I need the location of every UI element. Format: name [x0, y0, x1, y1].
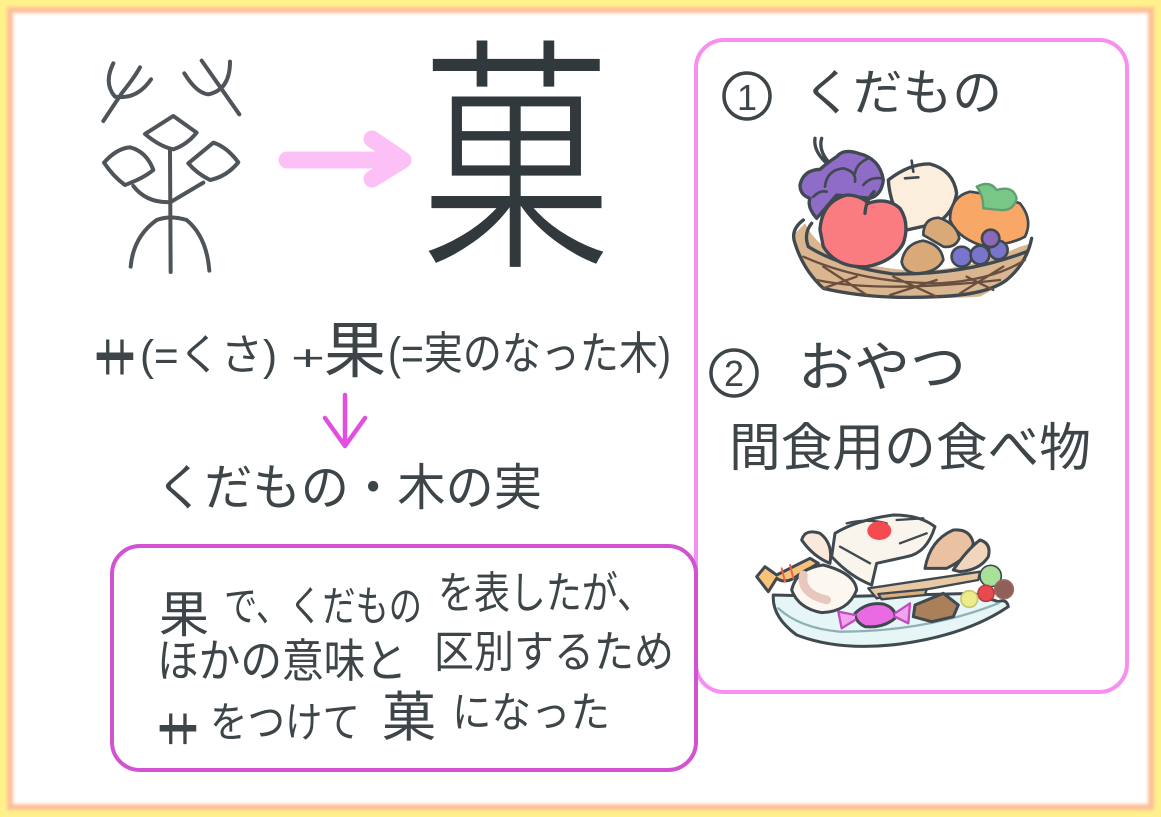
panel: explanation callout: [112, 546, 696, 770]
illustration: plate of sweets: [757, 515, 1013, 646]
chocolate block: [913, 593, 958, 622]
large character: 菓: [419, 23, 613, 303]
callout line 3 left: をつけて: [210, 699, 360, 746]
radical reading: (=くさ): [140, 332, 277, 380]
result text: くだもの・木の実: [156, 460, 542, 516]
icon: ancient pictograph of the character: [103, 61, 239, 272]
callout line 2 right: 区別するため: [434, 628, 674, 677]
grass radical: 艹: [157, 705, 199, 799]
small grapes: [952, 230, 1008, 267]
persimmon: [950, 184, 1028, 245]
panel: meanings: [696, 40, 1127, 692]
fruit character: 果: [159, 587, 209, 643]
heading: meaning 1: [724, 65, 1002, 121]
basket: [794, 220, 1032, 299]
callout line 3 right: になった: [452, 689, 610, 736]
label: snack: おやつ: [798, 338, 966, 398]
cake: [832, 515, 935, 585]
plate: [773, 593, 1008, 646]
grapes: [800, 138, 883, 218]
number 1: [724, 73, 770, 119]
number 2: 2: [724, 353, 744, 394]
arrow: down: [325, 395, 365, 446]
grass radical: 艹: [94, 329, 136, 437]
embedded large character: 菓: [382, 688, 436, 748]
fruit character: 果: [324, 317, 386, 386]
text: snack definition: 間食用の食べ物: [729, 420, 1091, 478]
chestnuts: [902, 218, 959, 273]
number 2: [711, 350, 757, 396]
heading: meaning 2: [711, 338, 966, 398]
apple: [820, 192, 906, 267]
wafer sticks: [868, 572, 980, 599]
callout line 1 end: を表したが、: [438, 569, 653, 618]
formula text: [94, 317, 671, 437]
striped candy: [757, 558, 818, 592]
bread: [802, 530, 989, 572]
plus sign: +: [291, 337, 325, 378]
number 1: 1: [737, 77, 757, 118]
round bun: [792, 565, 857, 613]
illustration: fruit basket: [794, 138, 1032, 299]
label: fruit: くだもの: [803, 65, 1002, 121]
callout line 2 left: ほかの意味と: [157, 635, 407, 687]
colored candies: [961, 565, 1013, 607]
arrow: pictograph to character: [287, 139, 403, 179]
callout line 1 middle: で、くだもの: [224, 583, 422, 630]
callout text: [157, 569, 674, 799]
pear: [888, 161, 957, 230]
wrapped purple candy: [838, 603, 910, 628]
fruit character meaning: (=実のなった木): [388, 328, 671, 379]
